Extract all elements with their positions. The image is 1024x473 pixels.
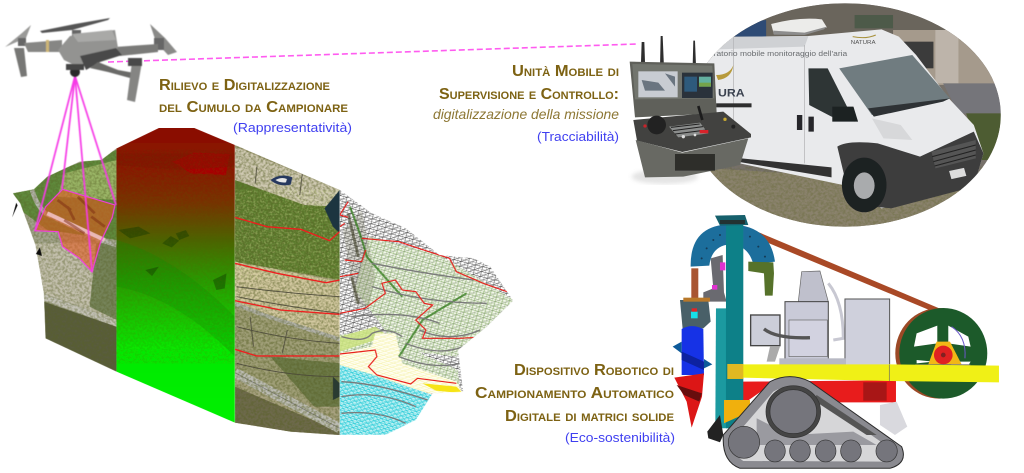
- blue auger: [682, 326, 704, 375]
- dashed link line from drone to mobile unit: [108, 44, 637, 62]
- drone footprint lines: [35, 76, 116, 272]
- grey rear wedge: [880, 402, 907, 435]
- green wheel: [895, 308, 987, 399]
- selected area overlay: [35, 189, 115, 272]
- brown rod: [691, 268, 698, 300]
- auger head: [680, 300, 711, 329]
- case lid: [630, 62, 717, 117]
- heading: survey of the pile: [159, 77, 352, 135]
- heading: survey of the pile: del Cumulo da Campionare: [159, 99, 348, 116]
- panel: mobile unit photo with van: laboratorio mobile monitoraggio dell'aria: [698, 50, 848, 58]
- van wheel: [842, 158, 887, 212]
- blue arc support: [691, 224, 775, 267]
- heading: robotic sampling device: Digitale di matrici solide: [505, 408, 674, 425]
- panel: mobile unit photo with van: URA: [718, 88, 745, 99]
- yellow beam: [742, 364, 999, 382]
- icon: drone: [5, 18, 177, 102]
- van front and bumper: [837, 132, 983, 208]
- icon: control case: [630, 36, 751, 184]
- selected area outline: [35, 189, 115, 272]
- case base: [633, 112, 751, 152]
- red drill tip: [674, 373, 704, 428]
- icon: robotic sampling device: [673, 215, 999, 468]
- heading: mobile supervision unit: (Tracciabilità): [537, 129, 619, 144]
- olive pipe: [748, 262, 774, 296]
- teal mast: [715, 308, 727, 428]
- red chassis: [742, 378, 896, 405]
- lid screens: [638, 71, 678, 97]
- van graphics and lettering: [716, 65, 733, 80]
- heading: robotic sampling device: [475, 362, 675, 445]
- antennas: [641, 36, 696, 68]
- heading: robotic sampling device: (Eco-sostenibilità): [565, 430, 675, 445]
- heading: survey of the pile: Rilievo e Digitalizzazione: [159, 77, 330, 94]
- roof dome: [771, 19, 827, 34]
- control panel: [647, 116, 666, 134]
- van body: [689, 29, 983, 208]
- track wheels: [728, 386, 897, 462]
- van windows: [808, 68, 855, 122]
- grey bracket: [703, 255, 727, 302]
- panel: mobile unit photo with van: [685, 0, 1005, 233]
- icon: dark shadow edge: [12, 203, 42, 256]
- heading: mobile supervision unit: Supervisione e Controllo:: [439, 86, 619, 103]
- panel: elevation model band: [115, 127, 237, 425]
- case shadow: [632, 169, 698, 184]
- engine and boxes: [751, 271, 890, 366]
- chart: red contour lines middle: [235, 217, 340, 356]
- photo background: [685, 0, 1005, 233]
- panel: orthophoto left section: [10, 143, 118, 377]
- heading: mobile supervision unit: digitalizzazione della missione: [433, 106, 619, 122]
- heading: mobile supervision unit: Unità Mobile di: [512, 63, 619, 80]
- heading: robotic sampling device: Campionamento Automatico: [475, 385, 674, 402]
- brown strut: [751, 230, 939, 312]
- crawler track: [707, 415, 723, 442]
- heading: robotic sampling device: Dispositivo Robotico di: [514, 362, 674, 379]
- heading: mobile supervision unit: [433, 63, 619, 144]
- panel: orthophoto middle section: [233, 143, 341, 437]
- orange block: [724, 400, 750, 423]
- panel: mobile unit photo with van: NATURA: [851, 40, 876, 46]
- chart: red contour lines mesh: [340, 202, 507, 384]
- panel: wireframe mesh section: [338, 187, 517, 438]
- 3D terrain model: [10, 127, 517, 438]
- heading: survey of the pile: (Rappresentatività): [233, 120, 352, 135]
